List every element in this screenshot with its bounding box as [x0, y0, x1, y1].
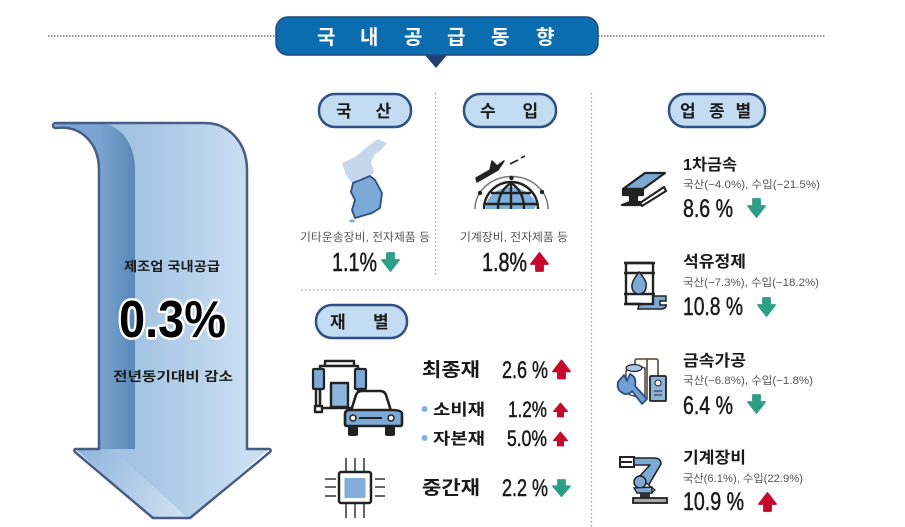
- title banner: [276, 17, 598, 68]
- pill heading: 업종별: 업종별: [680, 102, 751, 121]
- item: metal fabrication: 국산(−6.8%), 수입(−1.8%): [683, 374, 813, 387]
- pill heading: 재별: [316, 305, 407, 338]
- row: final goods: 2.6 %: [502, 357, 548, 384]
- item: primary metals: 8.6 %: [683, 195, 733, 223]
- item: petroleum refining: 석유정제: [683, 253, 746, 271]
- pill heading: 국산: [319, 94, 411, 127]
- item: machinery: 국산(6.1%), 수입(22.9%): [683, 472, 803, 485]
- panel dividers: [301, 93, 592, 527]
- panel: imports: [460, 94, 568, 277]
- item: metal fabrication: [618, 352, 813, 420]
- row: final goods: 최종재: [422, 359, 480, 381]
- pill heading: 재별: 재별: [330, 313, 389, 332]
- row: capital goods: 자본재: [433, 430, 485, 448]
- arrow note: year-on-year decrease: 전년동기대비 감소: [113, 369, 233, 384]
- arrow value: 0.3%: 0.3%: [119, 291, 226, 349]
- row: consumer goods: 1.2%: [508, 397, 547, 422]
- row: final goods: [422, 357, 570, 384]
- pill heading: 수입: 수입: [480, 102, 538, 121]
- value: 1.8%: 1.8%: [482, 247, 527, 277]
- pill heading: 수입: [464, 94, 556, 127]
- item: petroleum refining: 10.8 %: [683, 293, 743, 321]
- value: 1.1%: 1.1%: [332, 247, 377, 277]
- icon: red up arrow: [531, 253, 548, 271]
- row: capital goods: [422, 426, 567, 451]
- big down arrow panel: [53, 123, 271, 518]
- panel: by industry: [618, 94, 820, 516]
- item: machinery: [620, 449, 803, 516]
- item: metal fabrication: 6.4 %: [683, 392, 733, 420]
- icon: Korean peninsula map: [342, 139, 387, 222]
- item: petroleum refining: 국산(−7.3%), 수입(−18.2%): [683, 276, 819, 289]
- row: intermediate goods: 2.2 %: [502, 475, 548, 502]
- icon: semiconductor chip: [325, 458, 385, 518]
- icon: steel beam: [622, 173, 666, 206]
- item: machinery: 기계장비: [683, 449, 746, 467]
- icon: robot arm: [620, 457, 667, 503]
- title banner: 국내공급동향: [317, 26, 554, 49]
- item: petroleum refining: [624, 253, 819, 321]
- icon: factory machine and car: [313, 361, 402, 436]
- icon: wrench and machine: [618, 359, 666, 404]
- item: primary metals: 1차금속: [683, 156, 737, 174]
- icon: oil barrel: [624, 263, 666, 309]
- row: consumer goods: 소비재: [433, 401, 485, 419]
- item: metal fabrication: 금속가공: [683, 352, 746, 370]
- row: intermediate goods: 중간재: [422, 477, 480, 499]
- panel: domestic production: [300, 94, 430, 277]
- pill heading: 업종별: [669, 94, 765, 127]
- item: primary metals: 국산(−4.0%), 수입(−21.5%): [683, 178, 820, 191]
- arrow label: manufacturing domestic supply: 제조업 국내공급: [124, 259, 220, 274]
- row: capital goods: 5.0%: [507, 426, 547, 451]
- icon: airplane over globe: [475, 156, 548, 209]
- header dotted rule: [48, 35, 826, 37]
- item: primary metals: [622, 156, 820, 223]
- row: intermediate goods: [422, 475, 570, 502]
- text: import items: 기계장비, 전자제품 등: [460, 231, 568, 244]
- panel: by goods type: [313, 305, 570, 518]
- icon: green down arrow: [382, 253, 399, 271]
- text: domestic items: 기타운송장비, 전자제품 등: [300, 231, 430, 244]
- pill heading: 국산: 국산: [336, 102, 392, 121]
- row: consumer goods: [422, 397, 567, 422]
- item: machinery: 10.9 %: [683, 488, 744, 516]
